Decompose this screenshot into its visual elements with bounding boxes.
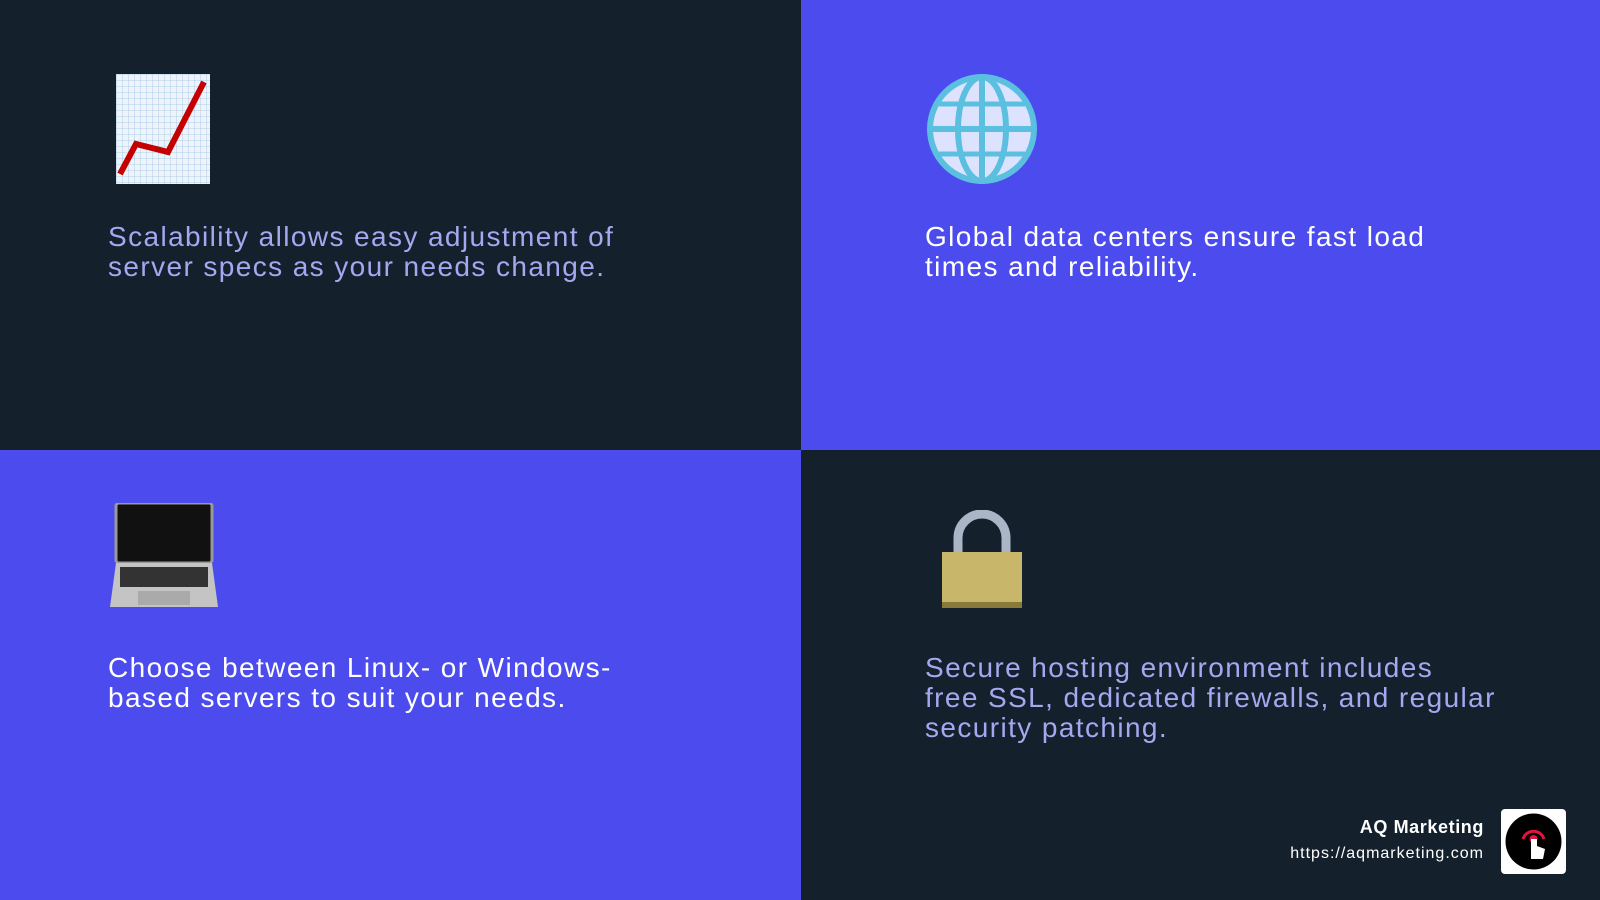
text: os choice: Choose between Linux- or Windows- [108,652,612,683]
text: scalability [108,221,614,282]
panel: os choice [0,450,801,900]
panel: scalability [0,0,801,450]
text: global: times and reliability. [925,251,1200,282]
text: global [925,221,1425,282]
brand name: AQ Marketing [1360,817,1484,837]
text: security: free SSL, dedicated firewalls, and regular [925,682,1496,713]
logo [1501,809,1566,874]
icon: chart [116,74,210,184]
text: os choice [108,652,612,713]
panel: global [801,0,1600,450]
text: security [925,652,1496,743]
text: os choice: based servers to suit your needs. [108,682,567,713]
icon: laptop [110,503,218,607]
text: security: Secure hosting environment includes [925,652,1433,683]
brand url: https://aqmarketing.com [1290,845,1484,862]
text: scalability: server specs as your needs change. [108,251,605,282]
icon: padlock [942,510,1022,608]
panel: security [801,450,1600,900]
brand block [1290,809,1566,874]
text: security: security patching. [925,712,1168,743]
icon: globe [927,74,1037,184]
text: global: Global data centers ensure fast load [925,221,1425,252]
text: scalability: Scalability allows easy adjustment of [108,221,614,252]
